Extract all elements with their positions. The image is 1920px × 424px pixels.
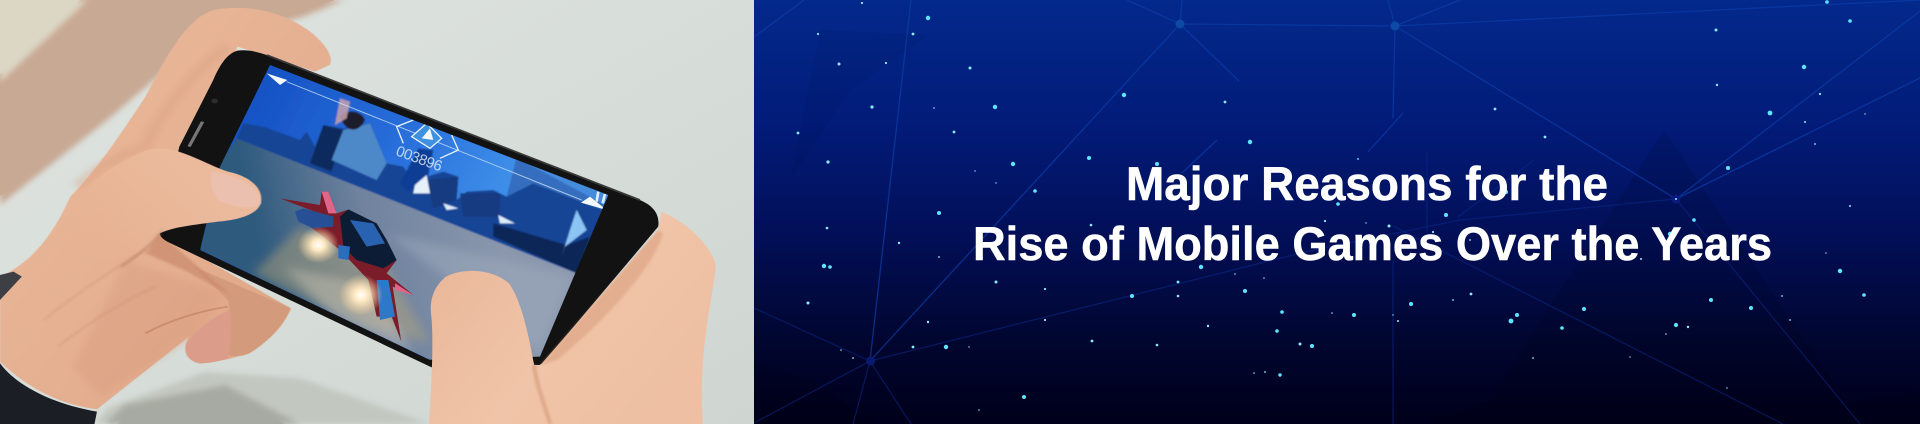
- stars small: [797, 2, 1866, 411]
- panel: starfield title banner: [754, 0, 1920, 424]
- title line 1: Major Reasons for the: [1126, 157, 1608, 210]
- left hand behind phone: [0, 8, 331, 409]
- panel: photo of hands playing a mobile game: [0, 0, 754, 424]
- fingers under the phone: [194, 267, 291, 356]
- left thumb: [58, 148, 261, 267]
- game screen: [200, 60, 620, 360]
- game score readout: 003896: [394, 143, 445, 175]
- faint polygon facets: [754, 30, 1920, 424]
- earpiece and camera: [189, 122, 203, 147]
- photo background: table and blurred floor: [0, 0, 754, 424]
- network lines: [754, 0, 1920, 361]
- icon: smartphone with game screen: [159, 50, 659, 367]
- right hand: [429, 212, 716, 424]
- game spaceship: [280, 192, 413, 342]
- screen sky: [200, 60, 620, 360]
- gradient background: [754, 0, 1920, 424]
- thruster glows: [298, 227, 339, 263]
- city skyline: [237, 123, 608, 273]
- wristband and watch: [0, 272, 97, 424]
- phone body: [159, 50, 659, 367]
- HUD lines and arrows: [287, 82, 582, 200]
- ground lighting: [253, 227, 430, 343]
- title line 2: Rise of Mobile Games Over the Years: [973, 217, 1772, 270]
- stars large: [822, 0, 1866, 399]
- title: [973, 157, 1772, 270]
- palm shading: [73, 260, 223, 397]
- screen ground: [200, 138, 577, 360]
- network nodes: [866, 20, 1680, 366]
